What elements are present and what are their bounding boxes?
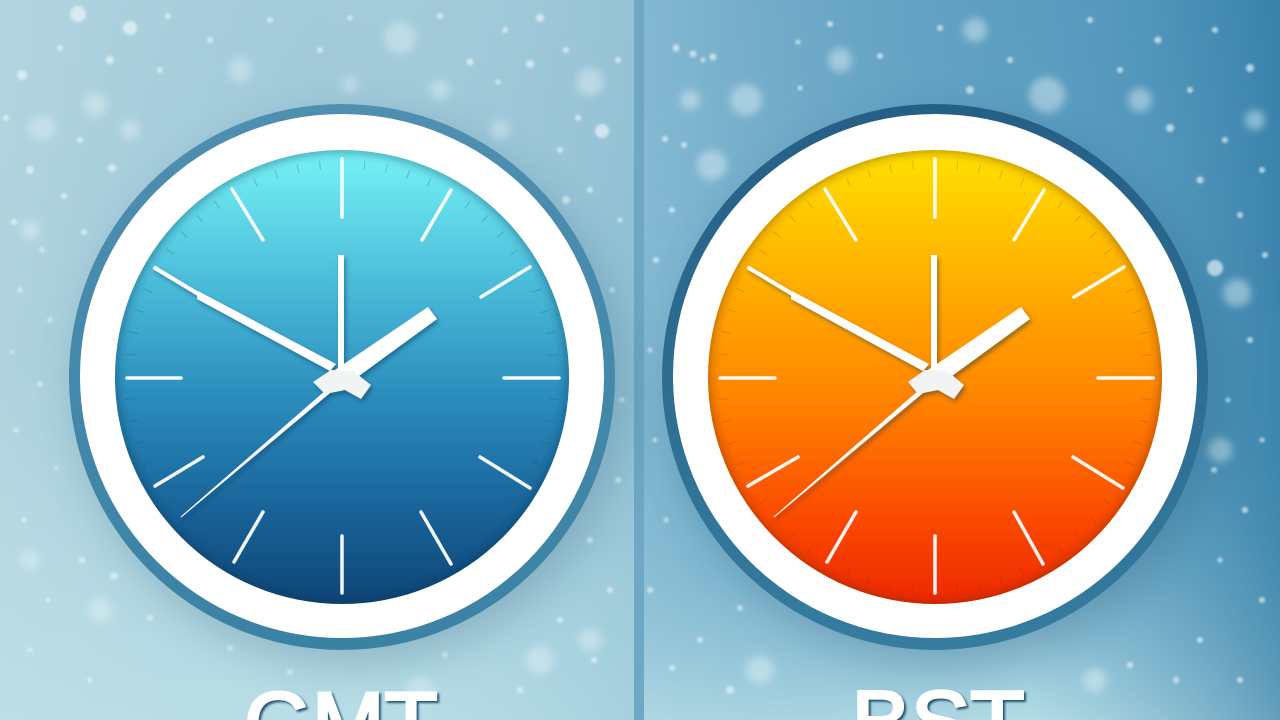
hour ticks [127,159,559,593]
hour hand [928,307,1030,381]
clock shadow [80,120,624,664]
clock hands [155,255,437,517]
vertical hand [931,255,937,372]
inner edge shadow [706,148,1164,606]
outer ring [69,104,615,650]
white bezel [673,114,1197,638]
minute hand [791,291,929,371]
second hand [181,388,334,517]
clock hands [749,255,1030,517]
minute hand tip [155,268,200,295]
background: right panel [644,0,1280,720]
dial face [708,150,1162,604]
clock: GMT [69,104,624,664]
minute ticks [129,164,555,590]
clock: BST [662,104,1217,664]
second hand [774,388,927,517]
minute hand [197,291,336,371]
outer ring [662,104,1208,650]
center divider [634,0,644,720]
hour hand [335,307,437,381]
minute hand tip [749,268,794,295]
snow particles: right panel [647,17,1268,694]
dial face [115,150,569,604]
hub [908,370,964,399]
vertical hand [338,255,344,372]
inner edge shadow [113,148,571,606]
background: left panel [0,0,636,720]
white bezel [80,114,604,638]
minute ticks [722,164,1148,590]
snow particles: left panel [3,6,624,704]
clock shadow [673,120,1217,664]
hub [313,370,371,399]
hour ticks [720,159,1153,593]
